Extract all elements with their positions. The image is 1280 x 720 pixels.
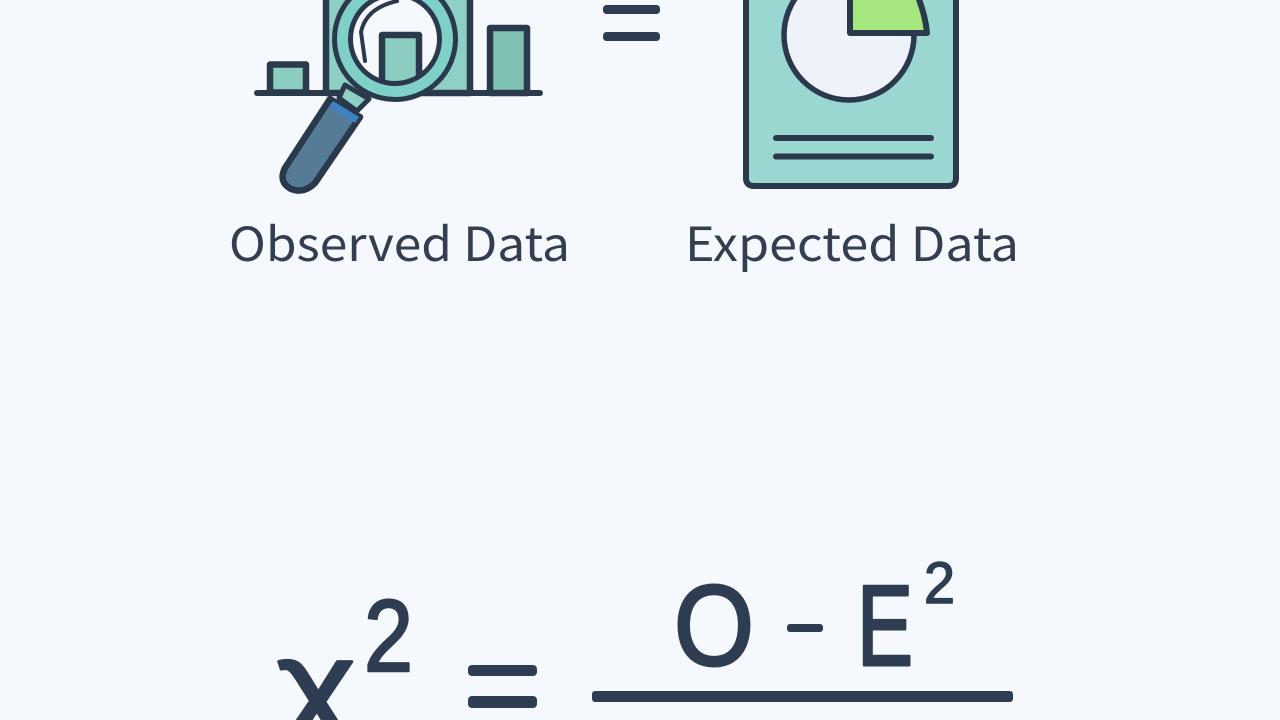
- text line two: [776, 154, 931, 160]
- magnifier neck: [339, 85, 369, 111]
- document page: [746, 0, 956, 186]
- numerator minus: [787, 624, 823, 632]
- icon: document with pie chart: [746, 0, 956, 186]
- small left bar: [270, 64, 306, 92]
- lens glare: [361, 1, 397, 61]
- formula equals sign: [468, 665, 537, 708]
- icon: magnifying glass over bar chart: [257, 0, 540, 191]
- numerator exponent: 2: [924, 551, 955, 616]
- middle bar: [382, 35, 419, 93]
- label: observed data: Observed Data: [229, 206, 570, 275]
- magnifier handle band: [329, 101, 359, 123]
- fraction bar: [592, 691, 1013, 702]
- magnifier ring: [342, 0, 448, 92]
- numerator E: E: [857, 563, 913, 690]
- formula: chi-square: [277, 551, 1013, 720]
- lens interior: [349, 0, 441, 85]
- numerator O: O: [674, 563, 754, 690]
- equals sign: top: [603, 5, 660, 41]
- large background bar: [326, 0, 470, 93]
- chart baseline: [257, 90, 540, 96]
- text line one: [776, 135, 931, 141]
- label: expected data: Expected Data: [685, 206, 1019, 275]
- pie slice: [850, 0, 927, 33]
- magnifier handle: [283, 99, 360, 191]
- pie circle: [784, 0, 914, 100]
- right bar: [490, 28, 527, 93]
- chi exponent: 2: [364, 579, 413, 693]
